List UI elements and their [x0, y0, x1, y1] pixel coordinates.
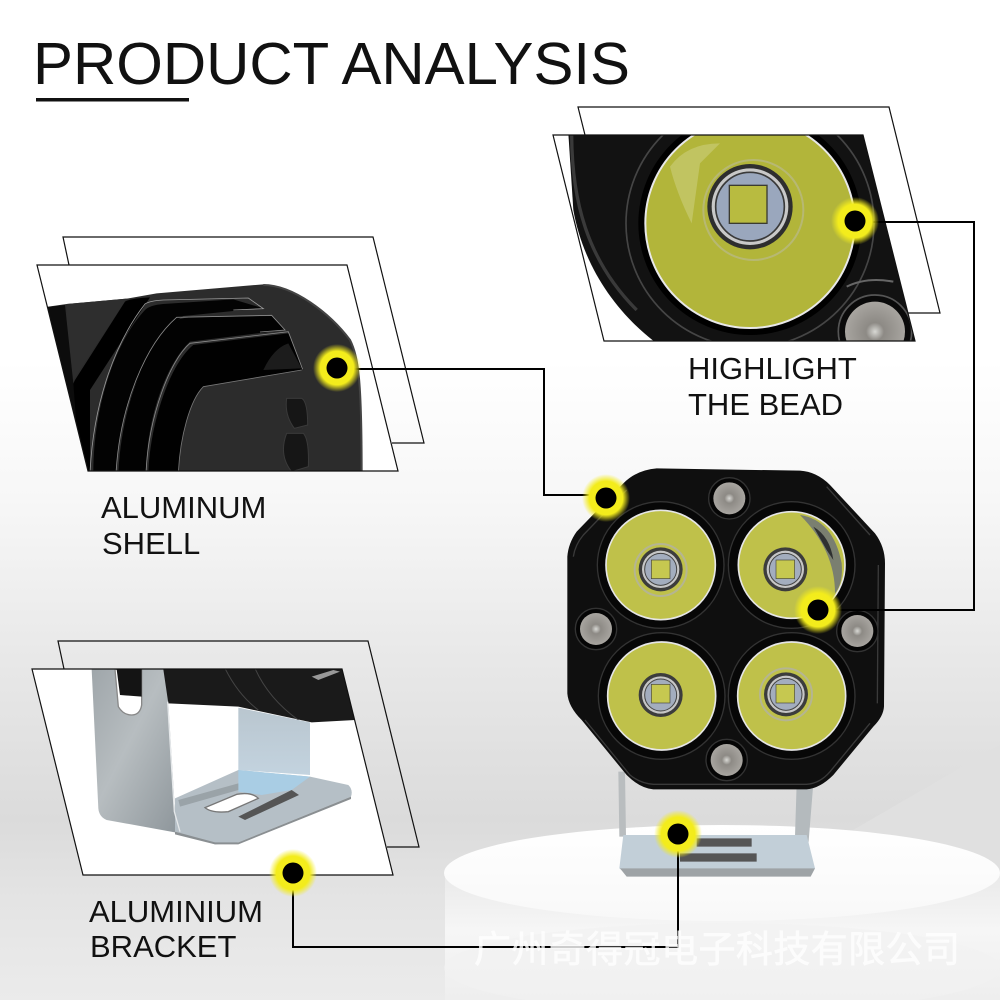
title: PRODUCT ANALYSIS [33, 31, 630, 97]
marker: shell [313, 344, 361, 392]
lens: bottom left [598, 633, 725, 759]
back frame [578, 107, 940, 313]
connector: bracket [293, 834, 678, 947]
bracket photo [92, 668, 355, 844]
label: aluminum shell [101, 490, 266, 561]
label: aluminium bracket [89, 894, 263, 964]
back frame [58, 641, 419, 847]
lamp [567, 468, 885, 877]
label: aluminium bracket: BRACKET [90, 929, 236, 964]
label: aluminium bracket: ALUMINIUM [89, 894, 263, 929]
panel: aluminum shell [37, 237, 424, 473]
lens [645, 119, 855, 328]
lens: top right [728, 502, 855, 628]
label: aluminum shell: ALUMINUM [101, 490, 266, 525]
marker: bead [831, 197, 879, 245]
bead photo [568, 136, 914, 340]
bead [707, 164, 793, 249]
marker: bracket [269, 849, 317, 897]
label: highlight the bead [688, 351, 857, 422]
bolt [838, 294, 912, 340]
back frame [63, 237, 424, 443]
front frame [37, 265, 398, 471]
panel: highlight the bead [552, 106, 941, 342]
bracket [618, 772, 815, 877]
marker: lamp bead [794, 586, 842, 634]
front frame fill [553, 135, 915, 341]
front frame fill [37, 265, 398, 471]
title underline [36, 98, 189, 102]
lens: top left [597, 502, 724, 628]
pedestal [444, 825, 1000, 1000]
front frame [553, 135, 915, 341]
shell photo [43, 284, 362, 473]
label: aluminum shell: SHELL [102, 526, 200, 561]
lens: bottom right [728, 633, 855, 759]
background wedge [853, 745, 1000, 860]
bolts [575, 478, 878, 781]
watermark: 广州奇得冠电子科技有限公司 [474, 929, 960, 970]
label: highlight the bead: THE BEAD [688, 387, 843, 422]
marker: lamp bracket [654, 810, 702, 858]
panel: aluminium bracket [32, 641, 419, 875]
connector: bead [818, 222, 974, 610]
front frame [32, 669, 393, 875]
connector: shell [337, 369, 606, 495]
housing [567, 468, 885, 789]
front frame fill [32, 669, 393, 875]
marker: lamp housing [582, 474, 630, 522]
label: highlight the bead: HIGHLIGHT [688, 351, 857, 386]
